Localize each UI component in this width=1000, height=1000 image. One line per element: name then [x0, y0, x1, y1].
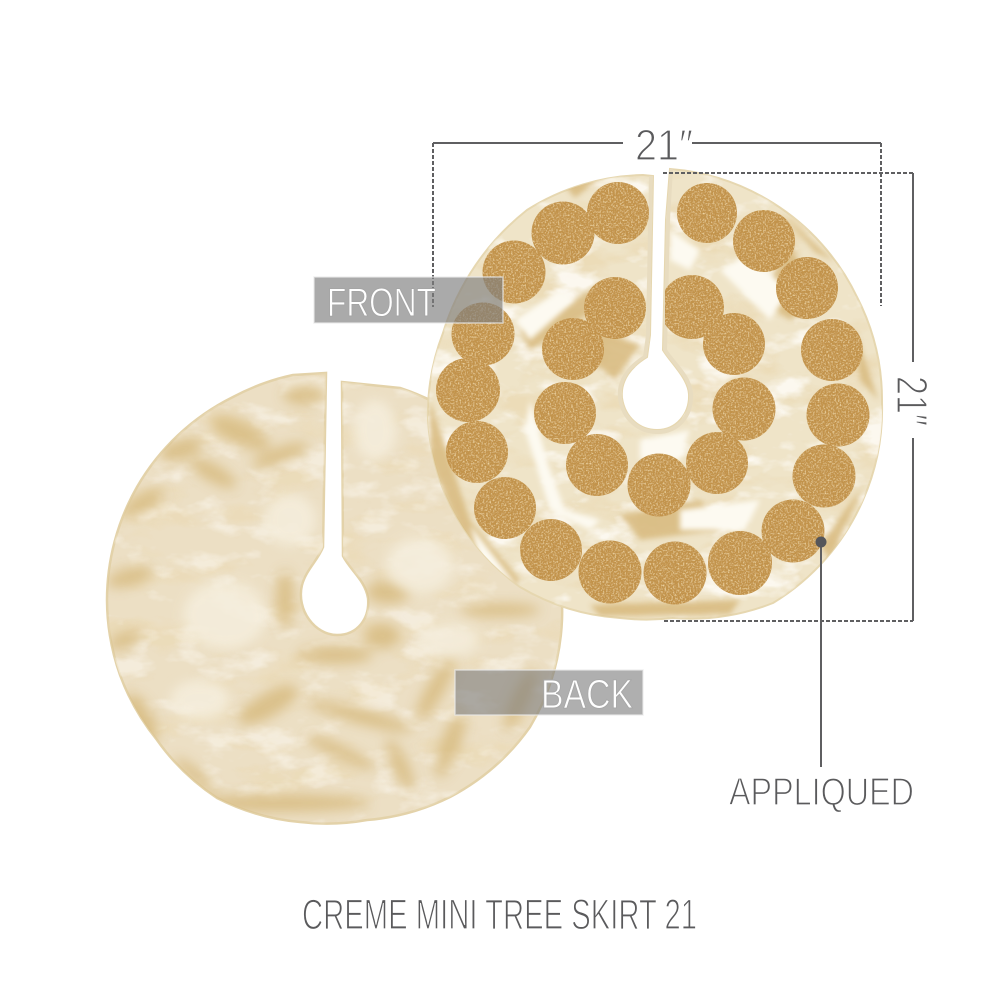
- title: CREME MINI TREE SKIRT 21: [302, 891, 697, 939]
- width dimension: 21 inches: [433, 121, 881, 307]
- height dimension: 21 inches: [663, 173, 936, 621]
- callout: appliqued: [729, 536, 914, 814]
- label: FRONT: [314, 277, 503, 325]
- back tree skirt: [100, 360, 570, 830]
- front appliqued circles: [436, 182, 870, 604]
- hole and slit piping: [620, 169, 691, 432]
- width dimension: 21 inches: 21″: [635, 121, 693, 170]
- label: FRONT: FRONT: [327, 281, 436, 325]
- label: BACK: BACK: [541, 671, 633, 717]
- label: BACK: [455, 670, 643, 717]
- height dimension: 21 inches: 21″: [887, 376, 936, 426]
- front tree skirt: [420, 160, 890, 625]
- callout: appliqued: APPLIQUED: [729, 771, 914, 814]
